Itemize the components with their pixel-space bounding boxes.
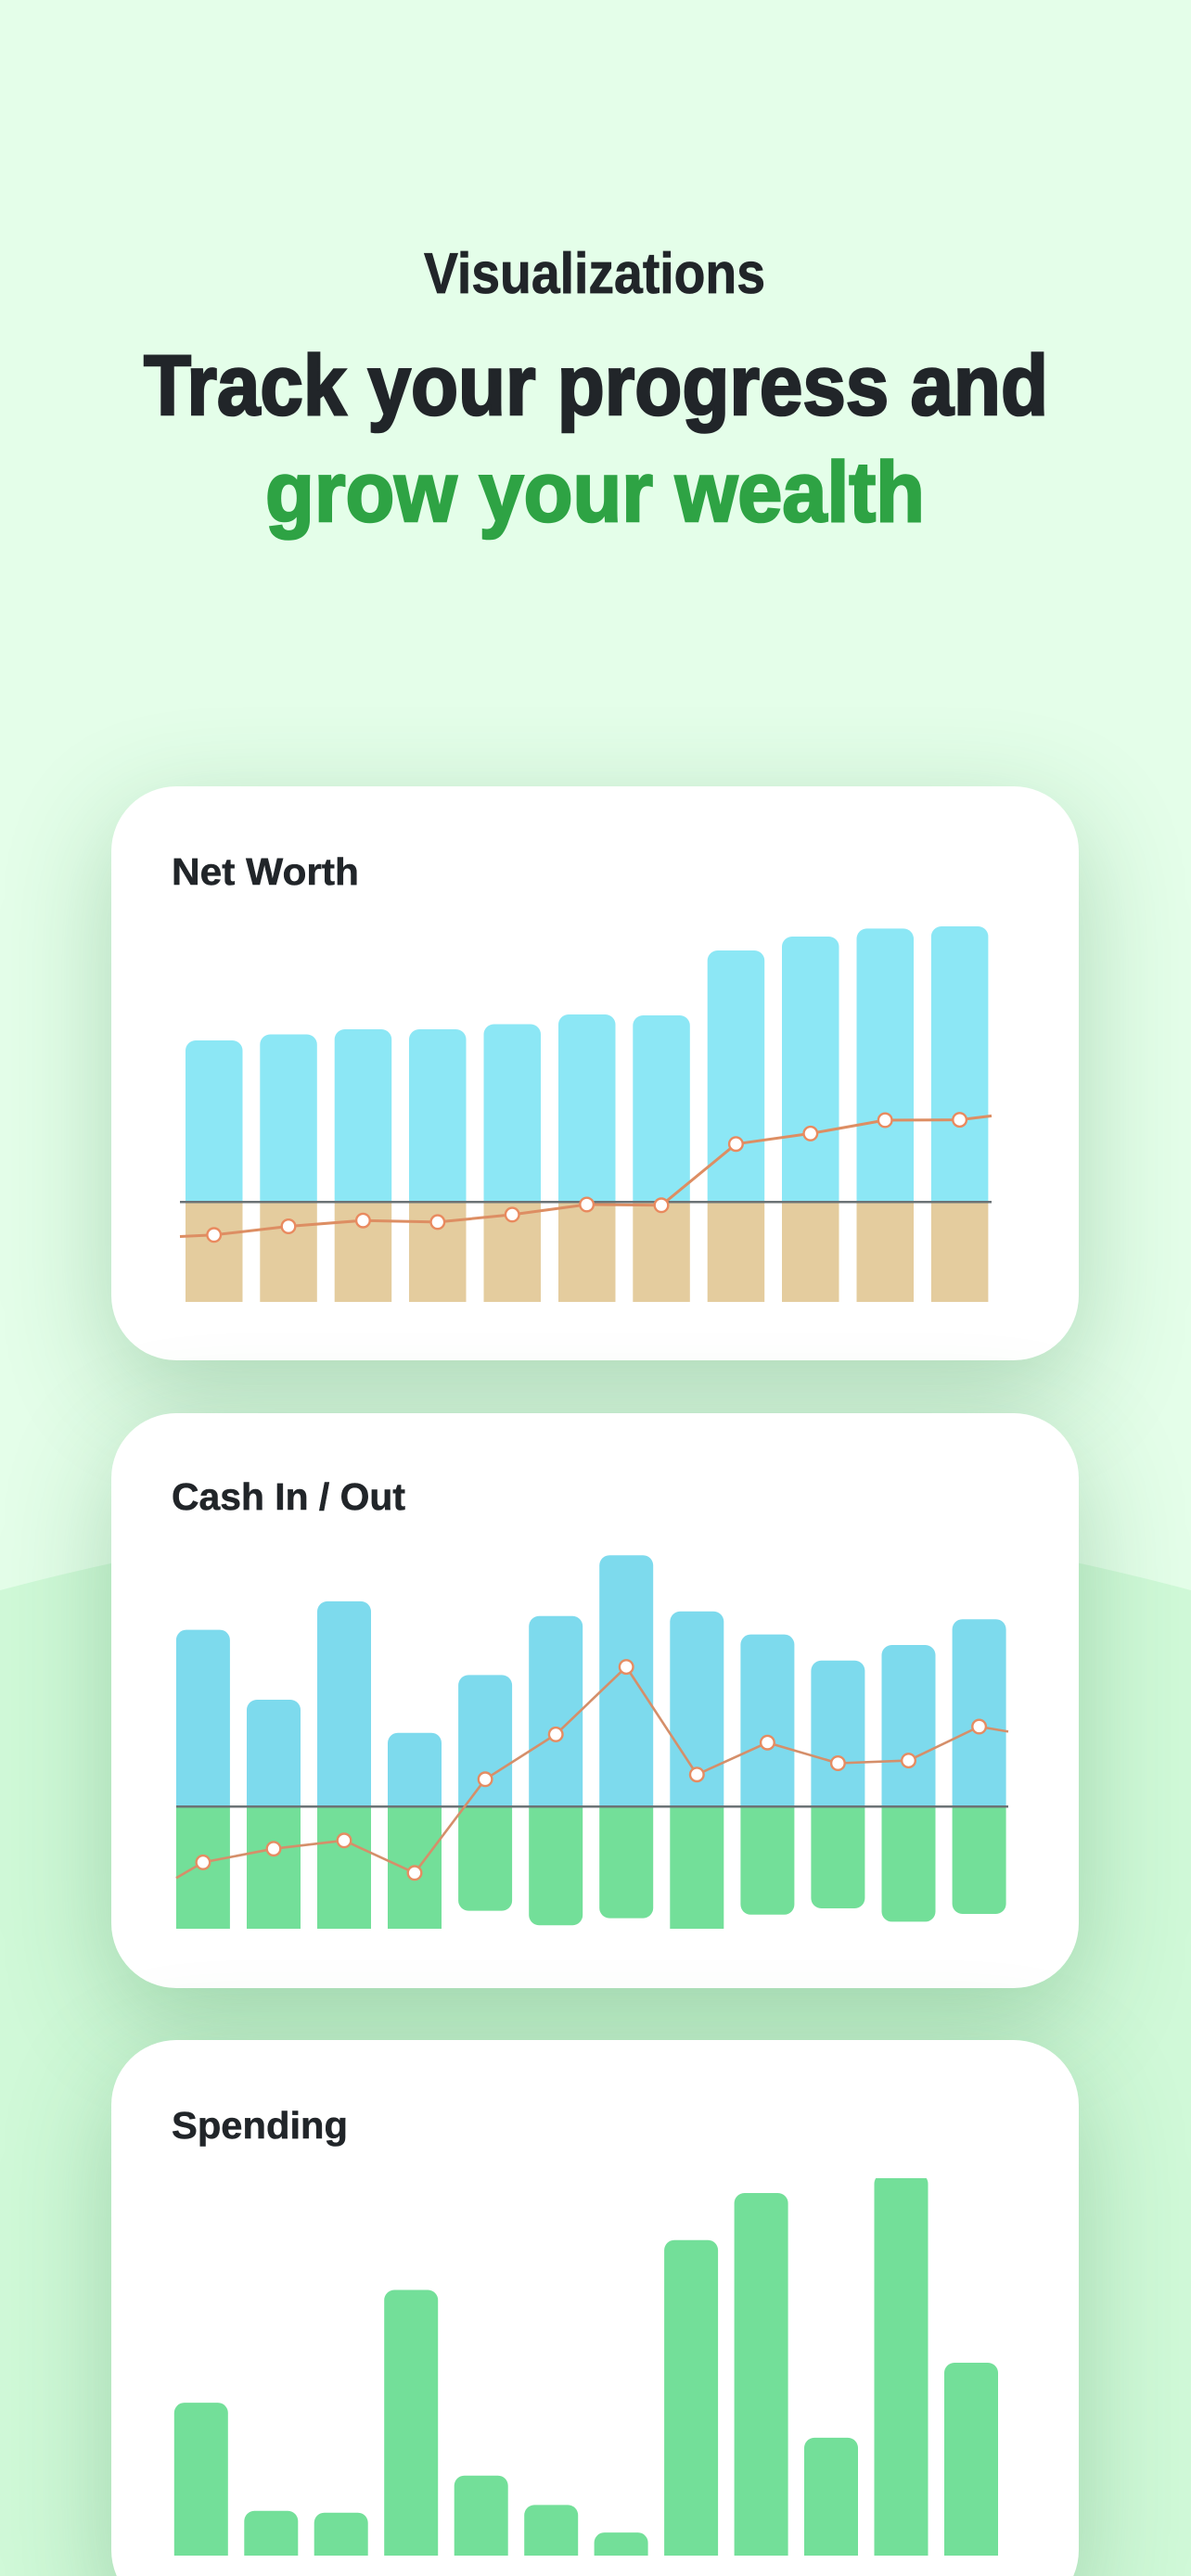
eyebrow: Visualizations: Visualizations [424,242,765,306]
panel: Net Worth [111,786,1079,1360]
title line: grow your wealth: grow your wealth [265,445,925,540]
chart: trend line [176,1660,1008,1880]
chart: trend line [180,1113,992,1242]
chart: cash in bars [176,1555,1006,1806]
chart: positive bars [186,926,988,1230]
heading: Spending: Spending [172,2104,348,2147]
heading: Cash In / Out: Cash In / Out [172,1475,405,1518]
chart: negative bars [186,1202,988,1302]
panel: Spending [111,2040,1079,2576]
panel: Cash In / Out [111,1413,1079,1988]
chart: spending bars [174,2174,998,2576]
heading block [143,242,1048,541]
title line: Track your progress and: Track your progress and [144,338,1048,433]
chart: cash out bars [176,1806,1006,1929]
heading: Net Worth: Net Worth [172,850,359,893]
